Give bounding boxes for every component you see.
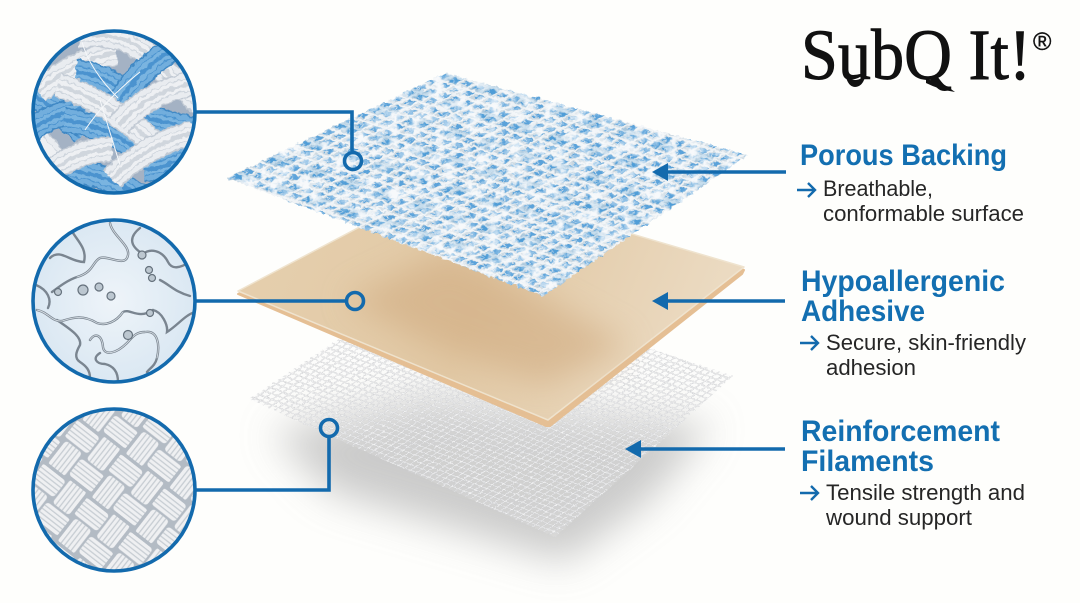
text block: reinforcement filaments: Filaments [801,445,934,478]
detail circle: adhesive polymer network [33,220,195,382]
arrow: adhesive [652,292,785,310]
text block: porous backing: conformable surface [823,201,1024,226]
leader: porous backing [195,112,362,170]
text block: hypoallergenic adhesive: Secure, skin-friendly [826,330,1026,355]
layer: hypoallergenic adhesive [238,180,744,426]
text block: porous backing [797,139,1024,226]
leader: adhesive [195,292,364,310]
text block: hypoallergenic adhesive [800,265,1026,380]
text block: porous backing: Porous Backing [800,139,1007,172]
cast shadow [272,395,712,562]
text block: hypoallergenic adhesive: Hypoallergenic [801,265,1005,298]
arrow: reinforcement [625,440,785,458]
layer: porous backing [227,73,748,296]
text block: hypoallergenic adhesive: adhesion [826,355,916,380]
arrow: porous backing [652,163,786,181]
text block: reinforcement filaments: Tensile strength and [826,480,1025,505]
text block: hypoallergenic adhesive: Adhesive [801,295,925,328]
text block: reinforcement filaments: Reinforcement [801,415,1000,448]
layer stack: exploded dressing [227,73,748,562]
text block: reinforcement filaments [800,415,1025,530]
bullet arrow [800,336,818,350]
bullet arrow [797,183,815,197]
text block: reinforcement filaments: wound support [825,505,972,530]
detail circle: reinforcement weave [33,409,195,571]
text block: porous backing: Breathable, [823,176,933,201]
detail circle: porous backing weave [31,29,197,195]
leader: reinforcement [195,420,338,490]
layer: reinforcement filament mesh [249,277,733,537]
bullet arrow [800,486,818,500]
logo: SubQ It!: ® [1033,28,1052,56]
logo: SubQ It!: SubQ It! [801,15,1031,95]
